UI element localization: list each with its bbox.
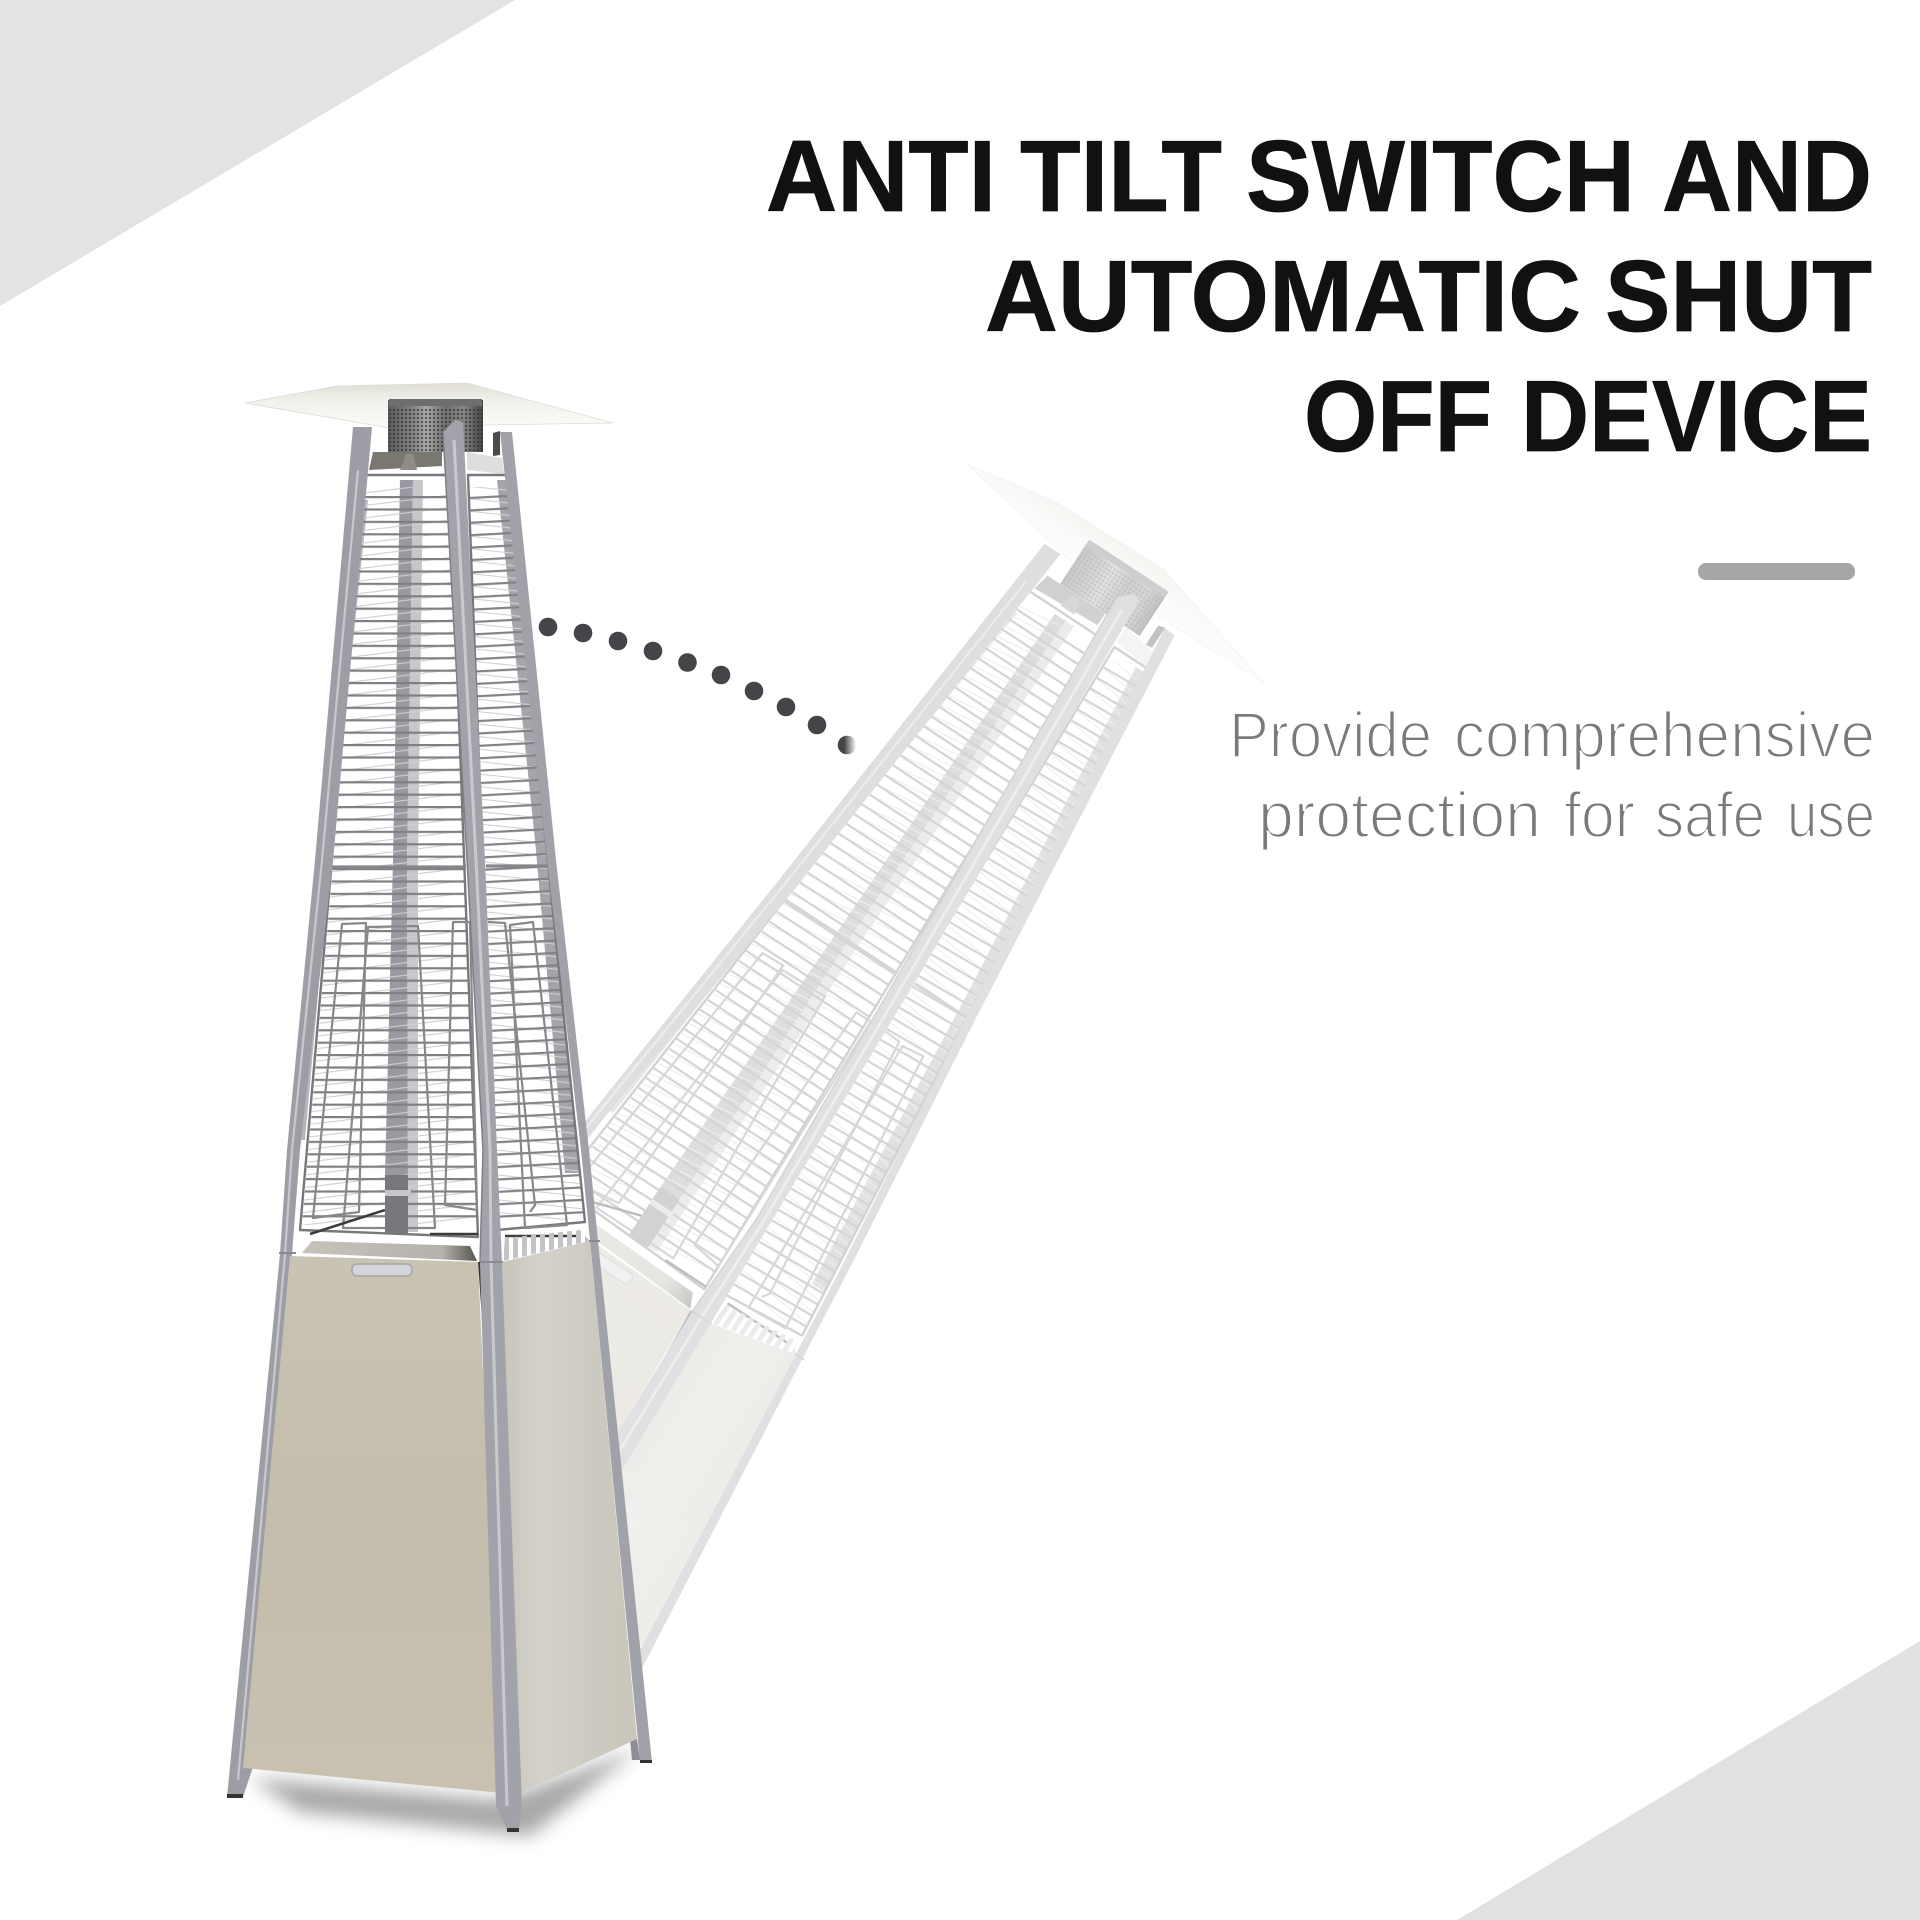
title: TILT <box>1020 121 1222 233</box>
cage mid ring <box>330 866 547 867</box>
centre frame leg <box>443 420 522 1832</box>
title: SHUT <box>1605 241 1872 353</box>
burner mesh cylinder <box>388 399 483 452</box>
floor shadow <box>250 1748 640 1836</box>
title: ANTI <box>766 121 996 233</box>
upright patio heater <box>227 383 652 1832</box>
top mounting brackets <box>369 431 504 474</box>
title: AUTOMATIC <box>985 241 1581 353</box>
description text: Provide <box>1229 699 1432 771</box>
door handle <box>352 1264 412 1276</box>
description text <box>1229 699 1875 851</box>
tilted ghost heater <box>586 464 1264 1668</box>
left frame leg <box>227 427 372 1798</box>
base right panel <box>502 1241 637 1793</box>
title: DEVICE <box>1521 361 1872 473</box>
background triangle: top left <box>0 0 515 306</box>
cage wires: right face <box>468 475 585 1230</box>
background triangle: bottom right <box>1457 1641 1920 1920</box>
cage wires: left face <box>300 475 478 1237</box>
description text: for <box>1564 779 1635 851</box>
title: AND <box>1662 121 1872 233</box>
rear frame columns <box>298 480 580 1232</box>
base front panel <box>243 1241 502 1793</box>
description text: safe <box>1655 779 1765 851</box>
title: OFF <box>1304 361 1492 473</box>
description text: protection <box>1258 779 1541 851</box>
dotted tilt arc <box>539 618 856 754</box>
collar band <box>279 1241 600 1262</box>
burner base bracket <box>310 1175 580 1236</box>
top lip <box>302 1241 477 1261</box>
divider bar <box>1698 563 1855 580</box>
silver burner tray <box>503 1230 590 1261</box>
lower inner wire guards <box>313 922 567 1228</box>
title <box>766 121 1872 473</box>
right frame leg <box>500 432 652 1763</box>
description text: comprehensive <box>1454 699 1875 771</box>
panel gap shadow <box>479 1262 516 1790</box>
description text: use <box>1787 779 1875 851</box>
title: SWITCH <box>1246 121 1635 233</box>
reflector hood <box>245 383 613 428</box>
